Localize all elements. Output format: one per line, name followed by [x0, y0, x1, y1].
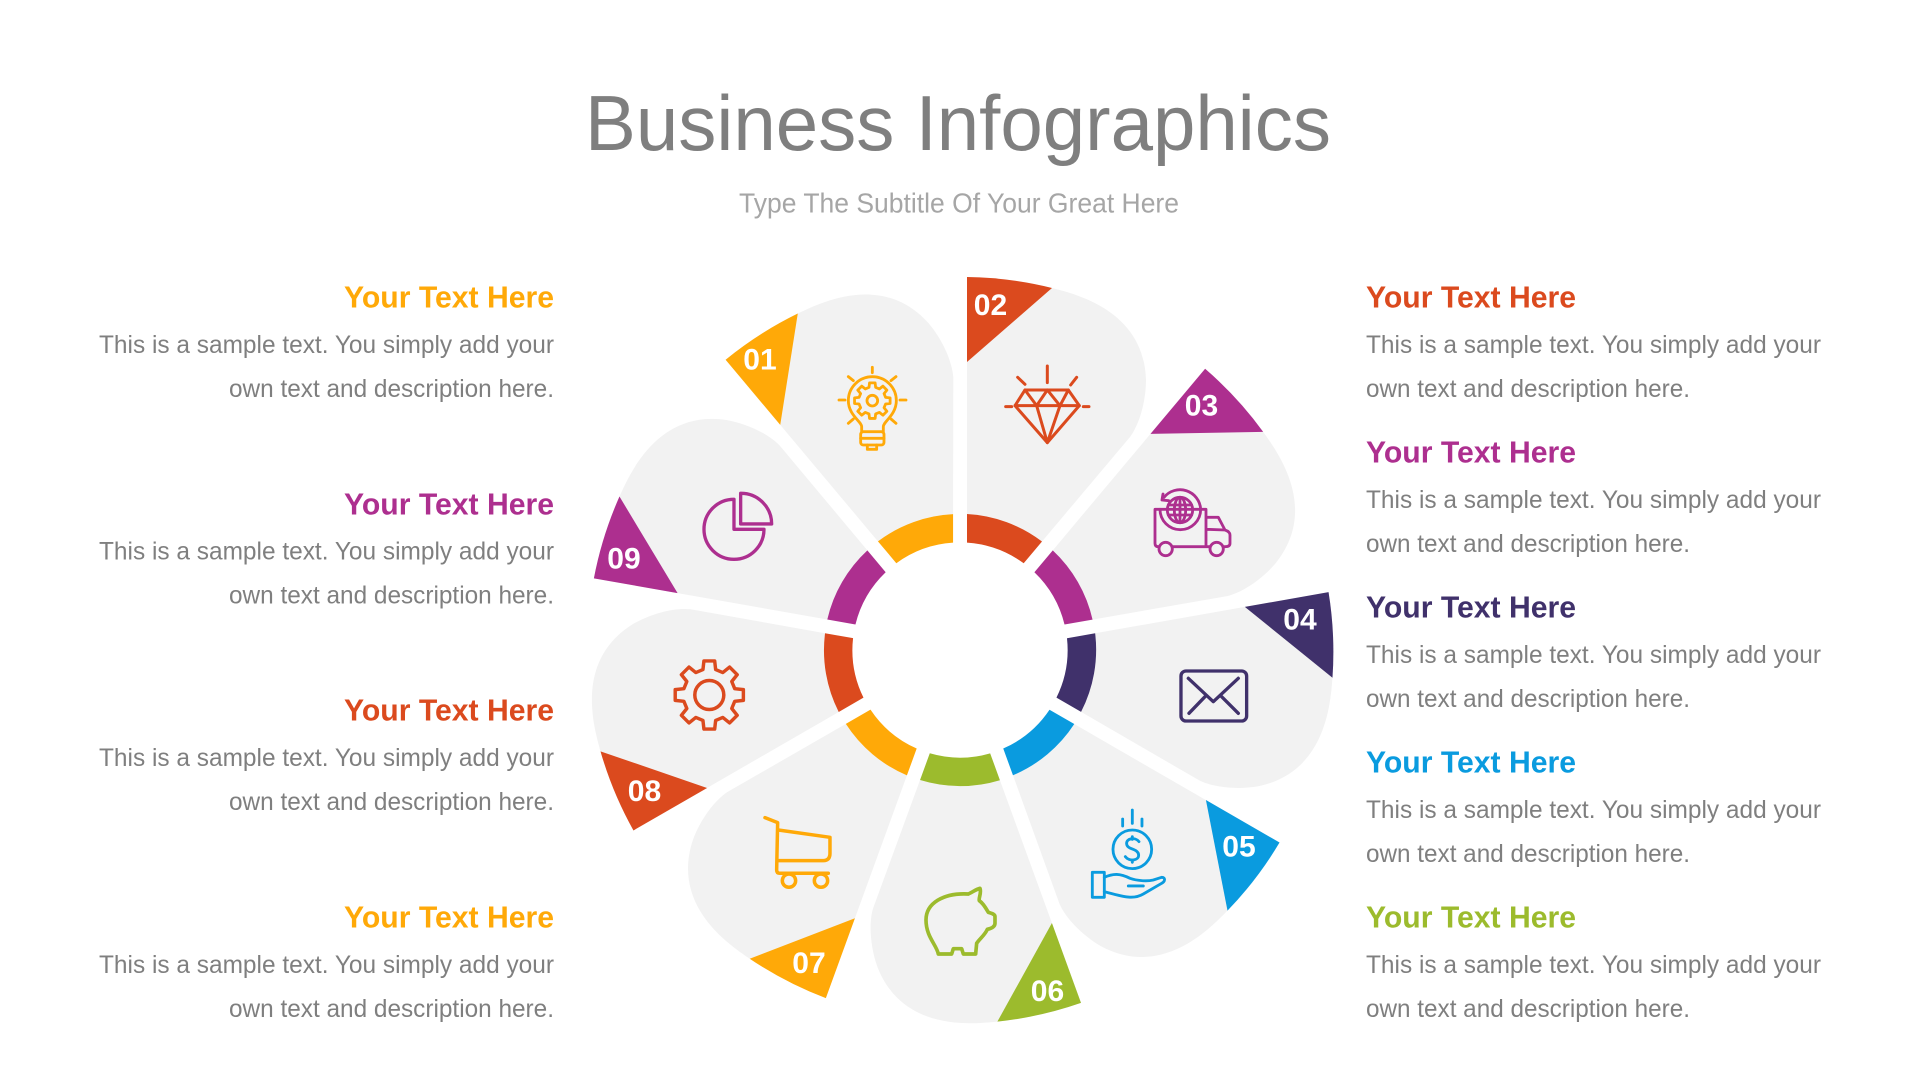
- text block: right 1: This is a sample text. You simply add your: [1366, 331, 1821, 359]
- petal 01: [726, 245, 1047, 579]
- number 09: 09: [607, 542, 641, 576]
- subtitle: Type The Subtitle Of Your Great Here: [739, 188, 1179, 218]
- text block: left 1: This is a sample text. You simply add your: [99, 331, 554, 359]
- number 04: 04: [1283, 604, 1317, 636]
- text block: left 2: [99, 486, 554, 609]
- petal 02: [967, 277, 1146, 563]
- text block: right 2: [1366, 434, 1821, 558]
- text block: left 1: Your Text Here: [344, 280, 554, 314]
- text block: right 2: Your Text Here: [1366, 434, 1576, 469]
- text block: left 4: own text and description here.: [229, 995, 554, 1023]
- text block: right 2: own text and description here.: [1366, 530, 1690, 558]
- text block: left 1: [99, 280, 554, 403]
- petal 03: [1021, 369, 1342, 703]
- text block: left 3: Your Text Here: [344, 692, 554, 728]
- title: Business Infographics: [585, 79, 1331, 167]
- text block: left 4: This is a sample text. You simply add your: [99, 951, 554, 979]
- text block: left 4: Your Text Here: [344, 899, 554, 934]
- number 08: 08: [628, 775, 661, 808]
- text block: right 2: This is a sample text. You simply add your: [1366, 486, 1821, 514]
- text block: right 5: Your Text Here: [1366, 899, 1576, 934]
- text block: right 3: This is a sample text. You simply add your: [1366, 641, 1821, 669]
- text block: right 4: own text and description here.: [1366, 840, 1690, 868]
- text block: right 3: own text and description here.: [1366, 685, 1690, 713]
- petal 08: [544, 532, 881, 830]
- petal 06: [815, 734, 1081, 1064]
- number 06: 06: [1031, 975, 1064, 1008]
- icon: diamond: [1006, 366, 1089, 443]
- text block: left 2: own text and description here.: [229, 581, 554, 609]
- number 02: 02: [974, 289, 1007, 322]
- number 01: 01: [743, 344, 777, 376]
- icon: delivery truck with globe: [1155, 490, 1230, 556]
- petal 09: [594, 402, 907, 628]
- text block: right 5: [1366, 899, 1821, 1023]
- text block: right 4: Your Text Here: [1366, 744, 1576, 779]
- petal 07: [658, 668, 924, 998]
- text block: right 1: own text and description here.: [1366, 375, 1690, 403]
- icon: shopping cart: [765, 818, 830, 887]
- text block: right 3: Your Text Here: [1366, 589, 1576, 624]
- text block: left 4: [99, 899, 554, 1023]
- text block: left 2: This is a sample text. You simply add your: [99, 537, 554, 565]
- text block: left 2: Your Text Here: [344, 486, 554, 521]
- text block: right 1: Your Text Here: [1366, 280, 1576, 314]
- icon: hand with coin: [1092, 810, 1165, 897]
- text block: right 5: own text and description here.: [1366, 995, 1690, 1023]
- text block: left 3: This is a sample text. You simply add your: [99, 744, 554, 772]
- petal 04: [1047, 592, 1360, 818]
- text block: left 3: [99, 692, 554, 816]
- icon: gear: [675, 661, 743, 729]
- petal 05: [942, 699, 1280, 998]
- icon: light bulb with gear: [839, 367, 906, 449]
- text block: left 3: own text and description here.: [229, 788, 554, 816]
- text block: right 5: This is a sample text. You simply add your: [1366, 951, 1821, 979]
- text block: right 3: [1366, 589, 1821, 713]
- icon: envelope: [1181, 671, 1247, 721]
- icon: pie chart: [704, 493, 772, 559]
- number 07: 07: [792, 947, 826, 980]
- icon: piggy bank: [926, 888, 995, 954]
- number 05: 05: [1222, 830, 1256, 864]
- text block: right 1: [1366, 280, 1821, 403]
- number 03: 03: [1185, 390, 1218, 422]
- text block: left 1: own text and description here.: [229, 375, 554, 403]
- text block: right 4: [1366, 744, 1821, 868]
- text block: right 4: This is a sample text. You simply add your: [1366, 796, 1821, 824]
